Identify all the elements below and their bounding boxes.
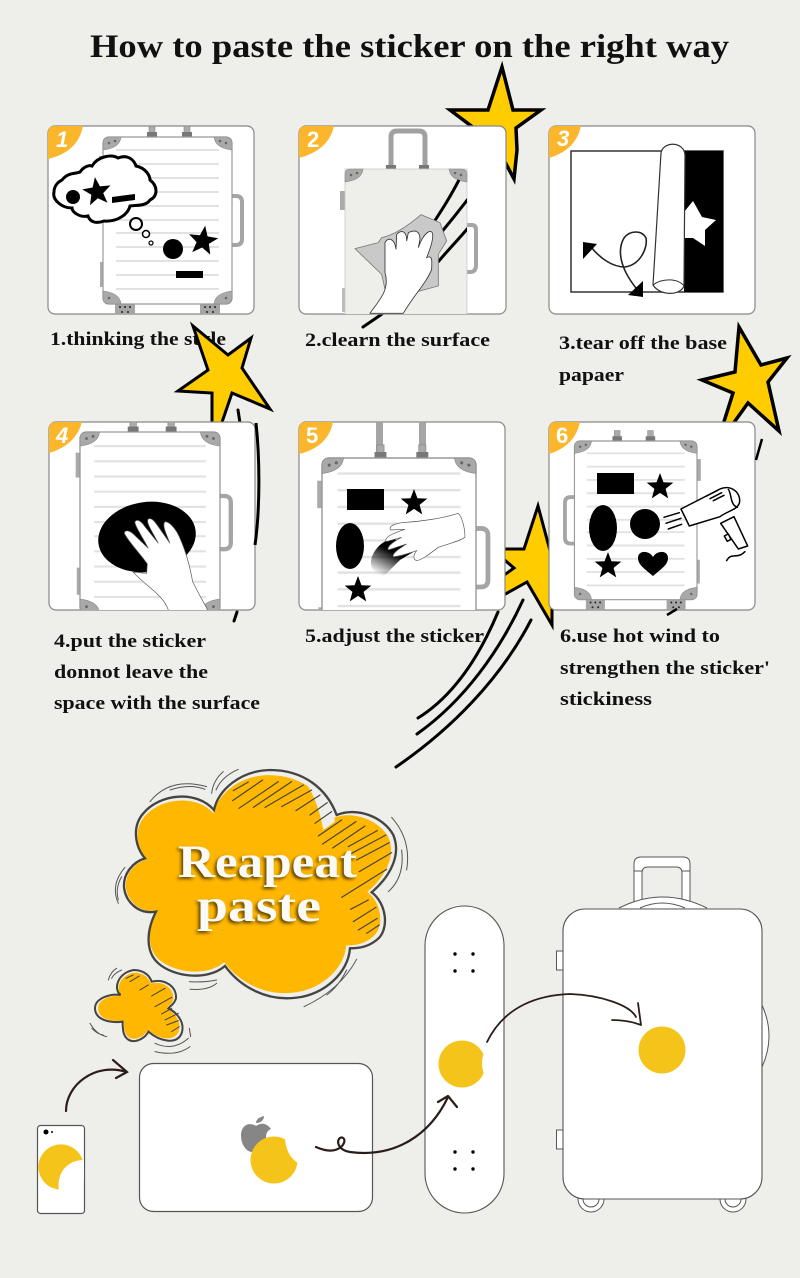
caption 3 <box>559 333 727 386</box>
caption 4: 4.put the sticker <box>54 631 207 652</box>
small cloud <box>90 968 191 1053</box>
cloud shape <box>115 769 408 1007</box>
sticker <box>250 1136 298 1184</box>
sticker sheet with peeled backing <box>571 144 723 293</box>
star: top behind card 2 <box>450 67 541 179</box>
curling arrow <box>583 232 646 297</box>
sticker <box>438 1040 486 1088</box>
number badge 6: 6 <box>556 423 568 448</box>
peeling sticker and hand <box>371 513 465 578</box>
number badge 4 <box>49 422 82 453</box>
suitcase being wiped <box>340 131 476 315</box>
suitcase <box>76 420 231 625</box>
arrow: skateboard to suitcase <box>487 994 641 1042</box>
number badge 2 <box>299 126 334 158</box>
suitcase with stickers <box>317 422 490 610</box>
big cloud: Reapeat paste <box>115 769 408 1007</box>
arrow: laptop to skateboard <box>316 1096 457 1153</box>
cloud text: Reapeat <box>178 836 357 888</box>
caption 5: 5.adjust the sticker <box>305 626 485 647</box>
sticker <box>638 1026 686 1074</box>
caption 3: papaer <box>559 365 625 386</box>
panel: step 3 tear off base paper <box>549 126 755 314</box>
hand with cloth <box>355 215 447 313</box>
number badge 4: 4 <box>55 423 68 448</box>
streak lines across suitcase <box>434 180 468 262</box>
number badge 6 <box>549 422 580 454</box>
number badge 5 <box>299 422 333 454</box>
number badge 1 <box>48 126 83 159</box>
number badge 1: 1 <box>56 127 68 152</box>
pressing hand <box>124 519 208 611</box>
star: right behind card 6 <box>702 327 787 431</box>
number badge 3 <box>549 126 581 158</box>
star trail on card 4 <box>255 423 259 545</box>
arrow: phone to laptop <box>66 1060 127 1111</box>
caption 1: 1.thinking the style <box>50 329 226 350</box>
black oval sticker <box>94 496 200 578</box>
laptop with apple logo and sticker <box>140 1064 372 1212</box>
panel: step 1 thinking the style <box>48 126 254 315</box>
panel: step 4 put the sticker <box>49 420 259 625</box>
caption 2: 2.clearn the surface <box>305 330 490 351</box>
panel: step 5 adjust the sticker <box>298 421 506 611</box>
caption 4: donnot leave the <box>54 662 208 683</box>
panel: step 6 hot wind <box>549 422 762 615</box>
panel: step 2 clean the surface <box>299 126 506 315</box>
suitcase with stickers <box>99 126 242 315</box>
caption 6: 6.use hot wind to <box>560 626 720 647</box>
star: left behind card 4 <box>178 326 270 428</box>
caption 4 <box>54 631 260 714</box>
number badge 5: 5 <box>306 423 318 448</box>
phone with sticker <box>38 1126 84 1214</box>
thought cloud <box>54 156 156 245</box>
star trails <box>234 314 531 767</box>
caption 4: space with the surface <box>54 693 260 714</box>
cloud text line 2: paste <box>197 880 321 932</box>
caption 6 <box>560 626 770 710</box>
star trail on card 6 <box>667 439 762 615</box>
caption 6: strengthen the sticker' <box>560 658 770 679</box>
suitcase with stickers <box>565 431 701 610</box>
number badge 2: 2 <box>307 127 319 152</box>
caption 6: stickiness <box>560 689 652 710</box>
suitcase with sticker <box>556 857 769 1212</box>
title: How to paste the sticker on the right way <box>90 29 730 65</box>
star: between cards 5 and 6 <box>500 506 552 625</box>
apple logo <box>241 1116 271 1152</box>
caption 3: 3.tear off the base <box>559 333 727 354</box>
number badge 3: 3 <box>557 126 569 151</box>
skateboard with sticker <box>425 906 504 1213</box>
hair dryer <box>664 488 748 561</box>
